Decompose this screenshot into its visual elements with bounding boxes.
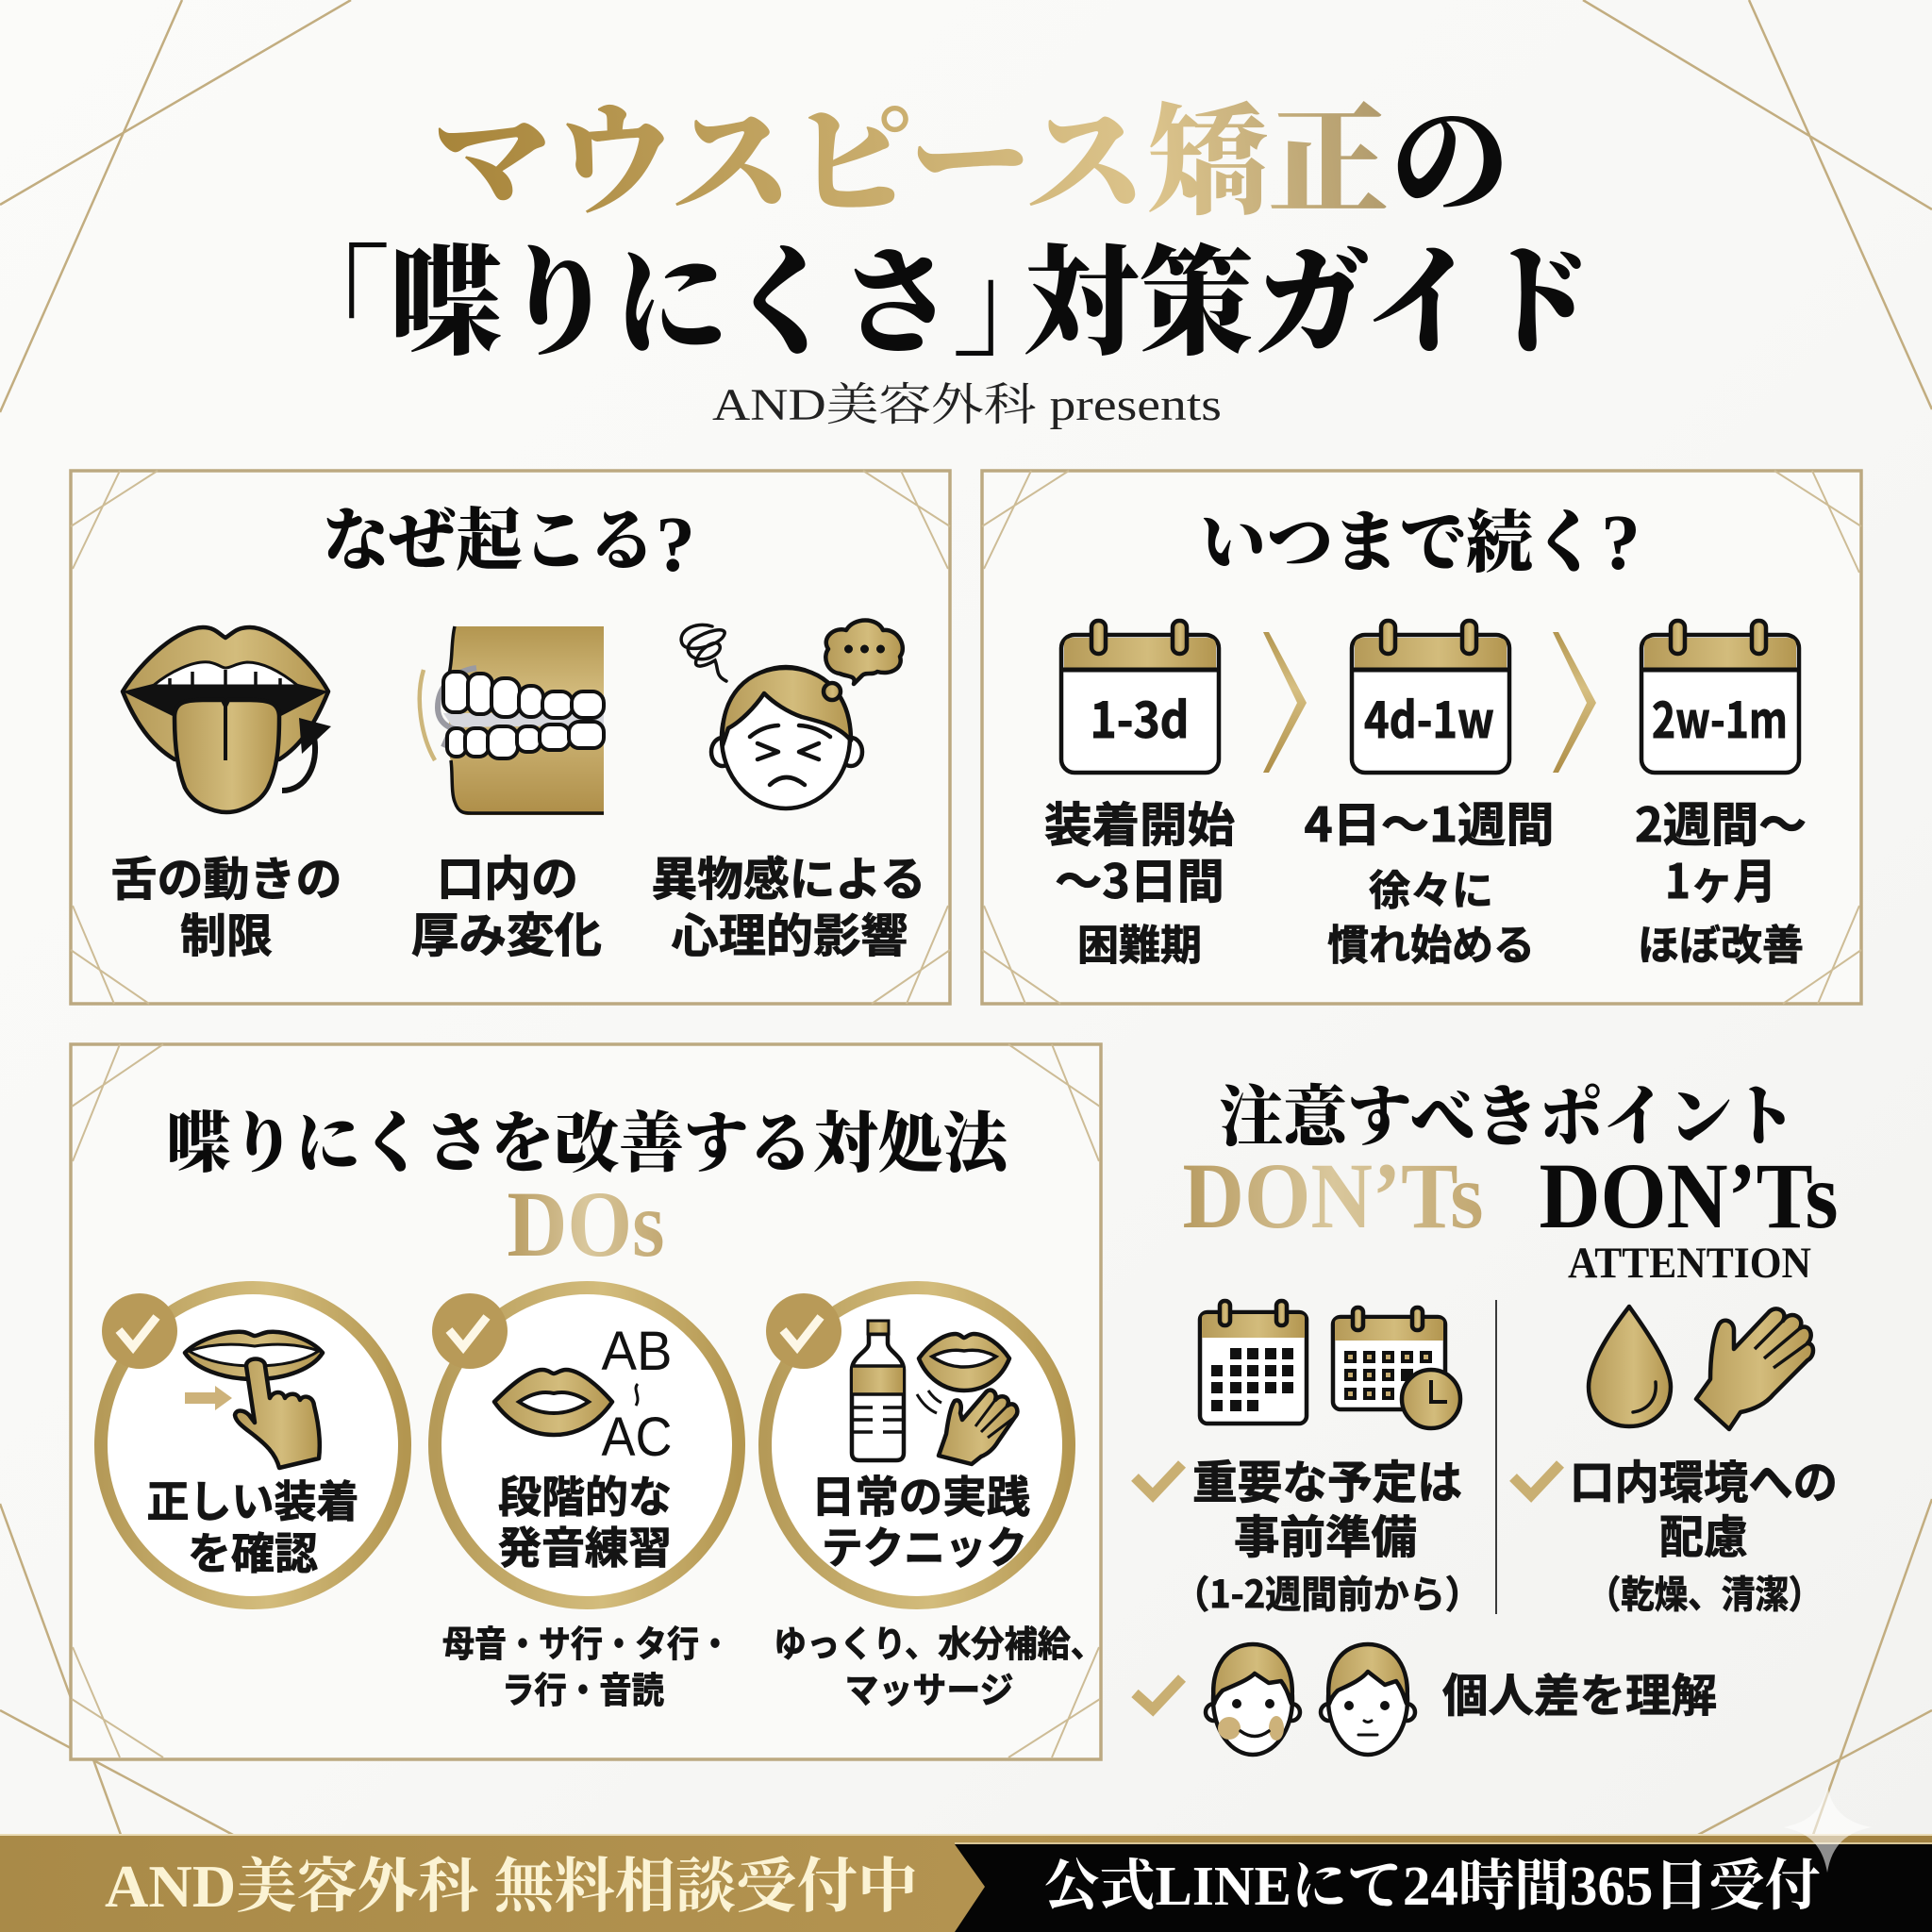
icon: lips with letters: AB xyxy=(602,1321,672,1382)
stage 1 text xyxy=(1044,788,1235,972)
note: daily technique: マッサージ xyxy=(845,1661,1013,1713)
icon: lips and finger xyxy=(185,1332,323,1468)
sparkle watermark xyxy=(1783,1786,1872,1873)
stage 3 text: 2週間～ xyxy=(1635,788,1807,856)
check badge xyxy=(432,1293,508,1369)
calendar: 2w-1m: 2w-1m xyxy=(1652,681,1788,752)
heading: attention: ATTENTION xyxy=(1568,1239,1811,1288)
point: oral environment: 配慮 xyxy=(1659,1500,1748,1566)
label: thickness xyxy=(411,841,602,966)
title line 1: の xyxy=(1391,65,1509,239)
label: tongue: 制限 xyxy=(180,899,273,966)
label: 正しい装着 xyxy=(147,1468,358,1530)
note: pronunciation xyxy=(442,1615,731,1713)
heading: DOs: DOs xyxy=(508,1172,664,1276)
calendar: 4d-1w: 4d-1w xyxy=(1364,681,1494,752)
label: を確認 xyxy=(188,1520,318,1582)
check badge xyxy=(102,1293,177,1369)
calendar: 2w-1m xyxy=(1641,621,1799,773)
panel: why it happens xyxy=(71,471,950,1004)
bottom banner xyxy=(0,1835,1932,1932)
panel: how long it lasts xyxy=(982,471,1861,1004)
label: thickness: 厚み変化 xyxy=(411,898,602,966)
icon: lips with letters xyxy=(494,1321,672,1468)
heading: why: ? xyxy=(656,501,695,589)
subtitle: AND美容外科 presents xyxy=(712,380,1222,430)
point: important plans: 事前準備 xyxy=(1234,1500,1417,1566)
stage 3 text xyxy=(1635,788,1807,972)
point: oral environment: （乾燥、清潔） xyxy=(1587,1564,1823,1619)
note: daily technique: ゆっくり、水分補給、 xyxy=(774,1615,1104,1667)
icon: neutral face xyxy=(1321,1644,1415,1755)
label xyxy=(498,1463,672,1576)
step: daily technique xyxy=(765,1288,1069,1603)
icon: hand xyxy=(1696,1308,1813,1429)
note: daily technique xyxy=(774,1615,1104,1713)
icon: tongue and lips xyxy=(123,627,331,812)
icon: calendar with clock xyxy=(1333,1307,1460,1428)
note: pronunciation: 母音・サ行・タ行・ xyxy=(442,1615,731,1667)
label: foreign body feeling: 異物感による xyxy=(651,842,926,909)
title line 2: 対策ガイド xyxy=(1024,208,1595,379)
stage 1 text: 困難期 xyxy=(1077,911,1202,972)
label: foreign body feeling xyxy=(651,842,926,966)
icon: water bottle xyxy=(852,1321,904,1460)
heading: points to note: 注意すべきポイント xyxy=(1219,1064,1796,1159)
stage 2 text: 4日～1週間 xyxy=(1304,788,1555,856)
icon: calendar month xyxy=(1200,1301,1307,1424)
stage 3 text: 1ヶ月 xyxy=(1665,844,1776,912)
icon: water drop xyxy=(1589,1307,1671,1426)
point: important plans: （1-2週間前から） xyxy=(1174,1564,1481,1619)
title line 2: 「喋りにくさ」 xyxy=(276,208,1066,379)
icon: open mouth xyxy=(919,1334,1009,1391)
stage 3 text: ほぼ改善 xyxy=(1638,911,1804,972)
step: pronunciation xyxy=(432,1288,739,1603)
title line 2 xyxy=(276,208,1595,379)
stage 2 text: 徐々に xyxy=(1369,857,1493,917)
divider xyxy=(1495,1300,1497,1614)
label xyxy=(147,1468,358,1582)
stage 2 text xyxy=(1304,788,1555,972)
label: 段階的な xyxy=(498,1463,672,1525)
icon: teeth with aligner xyxy=(420,626,604,815)
point: oral environment xyxy=(1513,1445,1838,1619)
icon: stressed face xyxy=(681,621,903,808)
heading: why: なぜ起こる xyxy=(323,486,656,584)
step: correct fit xyxy=(101,1288,405,1603)
heading: how long: いつまで続く xyxy=(1200,488,1599,586)
label xyxy=(811,1463,1030,1576)
stage 2 text: 慣れ始める xyxy=(1327,911,1535,972)
panel: DOs xyxy=(71,1044,1104,1759)
note: pronunciation: ラ行・音読 xyxy=(502,1661,664,1713)
point: individual differences: 個人差を理解 xyxy=(1442,1658,1717,1724)
label: thickness: 口内の xyxy=(437,841,578,909)
icon: smiling face xyxy=(1206,1644,1300,1755)
point: important plans: 重要な予定は xyxy=(1192,1445,1462,1511)
section: don'ts xyxy=(1135,1064,1838,1755)
banner text right: 公式LINEにて24時間365日受付 xyxy=(1043,1855,1821,1917)
label: tongue xyxy=(111,842,341,966)
heading: black DON'Ts: DON’Ts xyxy=(1540,1143,1838,1248)
title xyxy=(276,65,1595,430)
stage 1 text: ～3日間 xyxy=(1055,844,1224,912)
icon: lips with letters: AC xyxy=(602,1407,672,1468)
calendar: 1-3d: 1-3d xyxy=(1091,681,1189,752)
black banner section xyxy=(955,1844,1932,1932)
banner text left: AND美容外科 無料相談受付中 xyxy=(105,1854,918,1920)
label: tongue: 舌の動きの xyxy=(111,842,341,909)
stage 1 text: 装着開始 xyxy=(1044,788,1235,856)
check badge xyxy=(766,1293,841,1369)
title line 1: マウスピース矯正 xyxy=(431,65,1390,239)
arrow 2 xyxy=(1553,632,1596,773)
point: individual differences xyxy=(1135,1644,1717,1755)
label: 発音練習 xyxy=(498,1514,672,1576)
icon: massage hand xyxy=(917,1391,1017,1464)
heading: gold DON'Ts: DON’Ts xyxy=(1183,1143,1483,1248)
arrow 1 xyxy=(1263,632,1307,773)
label: テクニック xyxy=(822,1514,1027,1576)
heading: how long: ? xyxy=(1601,499,1641,587)
point: oral environment: 口内環境への xyxy=(1570,1445,1838,1511)
calendar: 4d-1w xyxy=(1352,621,1509,773)
label: foreign body feeling: 心理的影響 xyxy=(672,899,908,966)
calendar: 1-3d xyxy=(1061,621,1219,773)
heading: remedies: 喋りにくさを改善する対処法 xyxy=(166,1091,1015,1186)
point: important plans xyxy=(1135,1445,1481,1619)
label: 日常の実践 xyxy=(811,1463,1030,1525)
